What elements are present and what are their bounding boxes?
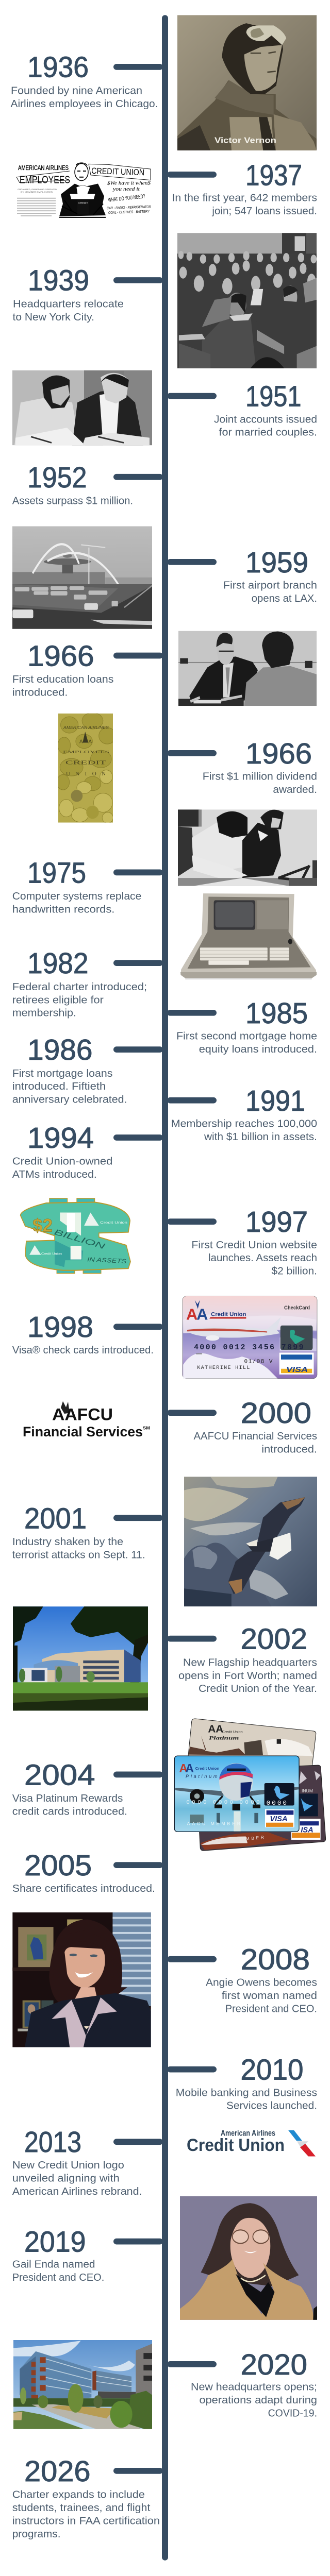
description xyxy=(12,1156,112,1180)
flag card: ISA xyxy=(301,1826,314,1835)
photo: gold coin booklet: CREDIT xyxy=(65,760,107,766)
logo: American Airlines Credit Union: Credit Union xyxy=(187,2136,285,2155)
description: Computer systems replace xyxy=(12,890,141,902)
timeline spine xyxy=(162,15,168,2561)
description: Membership reaches 100,000 xyxy=(171,1118,317,1129)
event: 2026 xyxy=(12,2455,163,2540)
photo: gold coin booklet xyxy=(57,713,116,823)
description: to New York City. xyxy=(13,311,94,323)
illustration: credit union cartoon ad: ORGANIZED, OWNED AND OPERATED xyxy=(18,188,57,191)
description xyxy=(12,1067,127,1106)
connector xyxy=(167,1010,217,1016)
description: for married couples. xyxy=(219,427,317,438)
check card: 4000 xyxy=(196,1352,202,1355)
description: Credit Union-owned xyxy=(12,1156,112,1167)
connector xyxy=(113,1134,163,1141)
photo: eagle in clouds xyxy=(184,1477,317,1606)
connector xyxy=(167,172,217,178)
year: 1998 xyxy=(27,1311,93,1344)
logo: American Airlines Credit Union: American Airlines xyxy=(221,2129,275,2138)
description: President and CEO. xyxy=(12,2272,104,2283)
year: 2008 xyxy=(240,1943,310,1976)
description xyxy=(214,414,317,438)
description: opens in Fort Worth; named xyxy=(178,1670,317,1682)
connector xyxy=(167,1956,217,1962)
year: 1982 xyxy=(27,947,89,980)
year: 1951 xyxy=(245,380,302,413)
logo: American Airlines Credit Union xyxy=(187,2129,316,2157)
description: Share certificates introduced. xyxy=(12,1883,155,1894)
description: join; 547 loans issued. xyxy=(211,205,317,217)
description xyxy=(223,580,317,604)
description xyxy=(12,673,113,699)
logo: AAFCU Financial Services: AAFCU xyxy=(52,1405,113,1423)
connector xyxy=(113,64,163,70)
sepia card: Platinum xyxy=(209,1735,239,1741)
year: 2019 xyxy=(24,2226,86,2258)
logo: AAFCU Financial Services: SM xyxy=(143,1426,150,1430)
connector xyxy=(113,653,163,658)
description: Gail Enda named xyxy=(12,2259,95,2270)
flag card: INUM xyxy=(302,1788,313,1793)
description xyxy=(171,1118,317,1143)
check card: A xyxy=(196,1306,208,1323)
photo: gold coin booklet: EMPLOYEES xyxy=(63,750,109,754)
description: operations adapt during xyxy=(199,2394,317,2406)
description: Industry shaken by the xyxy=(12,1536,123,1548)
year: 2010 xyxy=(240,2054,304,2086)
event: 1998 xyxy=(12,1311,163,1356)
description: membership. xyxy=(12,1007,76,1019)
event: 2013 xyxy=(12,2126,163,2197)
check card xyxy=(183,1296,317,1379)
description: President and CEO. xyxy=(225,2003,317,2014)
description: awarded. xyxy=(273,784,317,795)
illustration: credit union cartoon ad: CAR - RADIO - REFRIGERATOR xyxy=(107,205,151,210)
description: New Flagship headquarters xyxy=(183,1657,317,1668)
front card xyxy=(174,1756,299,1832)
connector xyxy=(167,1218,217,1225)
year: 1985 xyxy=(245,997,308,1030)
photo: gold coin booklet: AMERICAN AIRLINES xyxy=(63,725,109,730)
logo: AAFCU Financial Services: Financial Services xyxy=(23,1424,143,1439)
front card: Platinum xyxy=(186,1774,218,1779)
description: unveiled aligning with xyxy=(12,2173,120,2184)
illustration: credit union cartoon ad: CREDIT UNION xyxy=(91,166,144,177)
description: anniversary celebrated. xyxy=(12,1094,127,1106)
description: First education loans xyxy=(12,673,113,685)
description: First $1 million dividend xyxy=(203,771,317,783)
description: First airport branch xyxy=(223,580,317,591)
event: 1982 xyxy=(12,947,163,1019)
flag card: AACU MEMBER xyxy=(212,1835,264,1844)
connector xyxy=(113,474,163,480)
pin: $2 billion in assets: Credit Union xyxy=(100,1221,128,1225)
year: 2005 xyxy=(24,1850,92,1882)
description xyxy=(176,1030,317,1055)
description: opens at LAX. xyxy=(252,592,317,604)
flag card xyxy=(200,1765,326,1851)
connector xyxy=(113,1515,163,1521)
description: Airlines employees in Chicago. xyxy=(10,98,158,110)
connector xyxy=(113,2468,163,2474)
connector xyxy=(167,559,217,565)
description: First Credit Union website xyxy=(191,1239,317,1251)
flight symbol xyxy=(288,2130,302,2141)
photo: new headquarters 2020 xyxy=(13,2340,152,2429)
description xyxy=(12,890,141,915)
description: Visa Platinum Rewards xyxy=(12,1792,123,1804)
connector xyxy=(113,1862,163,1868)
illustration: credit union cartoon ad: $We have it when$ xyxy=(107,180,151,186)
description xyxy=(12,981,147,1019)
description xyxy=(172,192,317,217)
caption: Victor Vernon xyxy=(214,136,276,145)
description: New Credit Union logo xyxy=(12,2159,124,2171)
description: New headquarters opens; xyxy=(191,2381,317,2393)
pin: $2 billion in assets: $2 xyxy=(32,1215,53,1236)
description xyxy=(10,85,158,110)
description: credit cards introduced. xyxy=(12,1806,127,1817)
description xyxy=(178,1657,317,1694)
event: 2004 xyxy=(12,1759,163,1817)
front card: 0000 xyxy=(267,1800,287,1807)
year: 1936 xyxy=(27,51,89,83)
event: 1959 xyxy=(167,546,317,604)
connector xyxy=(113,277,163,283)
year: 1966 xyxy=(245,738,312,770)
description: introduced. xyxy=(12,687,68,699)
description: Visa® check cards introduced. xyxy=(12,1344,154,1356)
event: 2019 xyxy=(12,2226,163,2283)
description: Joint accounts issued xyxy=(214,414,317,425)
event: 1952 xyxy=(12,461,163,506)
connector xyxy=(167,750,217,756)
photo: Gail Enda xyxy=(180,2196,317,2320)
connector xyxy=(113,1324,163,1330)
pin: $2 billion in assets xyxy=(21,1198,130,1274)
year: 1937 xyxy=(245,159,302,192)
card body xyxy=(183,1296,317,1379)
event: 1966 dividend xyxy=(167,738,317,795)
year: 1966 xyxy=(27,640,94,672)
illustration: credit union cartoon ad: CREDIT xyxy=(78,202,88,205)
logo: AAFCU Financial Services xyxy=(23,1401,150,1439)
year: 2004 xyxy=(24,1759,95,1791)
illustration: credit union cartoon ad: EMPLOYEES xyxy=(20,174,70,185)
description: Charter expands to include xyxy=(12,2489,145,2501)
description: First mortgage loans xyxy=(12,1067,112,1079)
photo: vintage computer xyxy=(180,893,317,979)
description: equity loans introduced. xyxy=(199,1043,317,1055)
year: 1939 xyxy=(28,264,89,297)
description: ATMs introduced. xyxy=(12,1168,97,1180)
event: 2001 xyxy=(12,1502,163,1561)
check card: KATHERINE HILL xyxy=(197,1365,250,1370)
connector xyxy=(113,960,163,966)
event: 1936 xyxy=(10,51,163,110)
description: Founded by nine American xyxy=(11,85,142,97)
connector xyxy=(167,1097,217,1104)
event: 1991 xyxy=(167,1084,317,1143)
photo: gold coin booklet: UNION xyxy=(66,771,106,777)
pin: $2 billion in assets: BILLION xyxy=(53,1228,106,1251)
front card: AACU MEMBER xyxy=(187,1821,240,1826)
event: 2008 xyxy=(167,1943,317,2014)
photo: audience at meeting xyxy=(177,233,317,368)
sepia card: Credit Union xyxy=(222,1731,243,1734)
description xyxy=(12,2159,142,2197)
description: programs. xyxy=(12,2528,61,2540)
description xyxy=(191,1239,317,1277)
description xyxy=(12,2259,104,2283)
event: 2020 xyxy=(167,2348,317,2419)
photo: couple signing papers xyxy=(12,370,152,445)
event: 1975 xyxy=(12,857,163,915)
year: 2002 xyxy=(240,1623,307,1656)
event: 1985 xyxy=(167,997,317,1055)
description: First second mortgage home xyxy=(176,1030,317,1042)
description: In the first year, 642 members xyxy=(172,192,317,204)
description: students, trainees, and flight xyxy=(12,2502,151,2514)
description: Mobile banking and Business xyxy=(176,2087,317,2098)
illustration: credit union cartoon ad xyxy=(16,162,151,217)
photo: Angie Owens xyxy=(12,1912,151,2047)
year: 2001 xyxy=(24,1502,87,1535)
description: retirees eligible for xyxy=(12,994,104,1006)
photo: women at handwritten records xyxy=(178,809,317,886)
description: Headquarters relocate xyxy=(13,298,124,310)
front card: A xyxy=(179,1762,188,1775)
description: introduced. xyxy=(261,1444,317,1455)
illustration: credit union cartoon ad: COAL - CLOTHES - BATTERY xyxy=(108,210,150,215)
connector xyxy=(113,1771,163,1777)
description xyxy=(12,1792,127,1817)
sepia card: AA xyxy=(208,1724,223,1735)
event: 2010 xyxy=(167,2054,317,2112)
year: 2000 xyxy=(240,1397,311,1430)
description xyxy=(194,1430,317,1455)
description: American Airlines rebrand. xyxy=(12,2185,142,2197)
description xyxy=(176,2087,317,2112)
illustration: credit union cartoon ad: AMERICAN AIRLINES xyxy=(18,164,69,172)
connector xyxy=(167,1410,217,1416)
check card: Credit Union xyxy=(211,1311,246,1317)
description: Angie Owens becomes xyxy=(206,1977,317,1988)
year: 1986 xyxy=(27,1034,93,1066)
description: Federal charter introduced; xyxy=(12,981,147,993)
event: 1939 xyxy=(13,264,163,323)
sepia card xyxy=(188,1719,316,1768)
event: 1997 xyxy=(167,1206,317,1277)
front card: VISA xyxy=(270,1815,288,1823)
connector xyxy=(113,1046,163,1053)
check card: VISA xyxy=(286,1366,308,1374)
description xyxy=(13,298,124,323)
year: 2026 xyxy=(24,2455,91,2488)
event: 1994 xyxy=(12,1122,163,1180)
event: 1937 xyxy=(167,159,317,217)
pin: $2 billion in assets: Credit Union xyxy=(41,1252,62,1256)
event: 1986 xyxy=(12,1034,163,1106)
check card: 4000 0012 3456 7899 xyxy=(194,1344,304,1352)
photo: Fort Worth headquarters xyxy=(13,1606,148,1711)
front card: Credit Union xyxy=(195,1766,219,1771)
description: with $1 billion in assets. xyxy=(204,1131,317,1143)
description: handwritten records. xyxy=(12,904,114,915)
pin: $2 billion in assets: IN ASSETS xyxy=(87,1256,127,1265)
description: AAFCU Financial Services xyxy=(194,1430,317,1442)
connector xyxy=(167,2361,217,2367)
year: 1959 xyxy=(245,546,308,579)
event: 1966 education loans xyxy=(12,640,163,699)
check card: A xyxy=(186,1306,197,1323)
connector xyxy=(113,2139,163,2145)
illustration: credit union cartoon ad: you need it xyxy=(112,186,140,192)
description xyxy=(191,2381,317,2419)
event: 2000 xyxy=(167,1397,317,1455)
illustration: credit union cartoon ad: BY MEMBER EMPLOYEES xyxy=(21,191,53,193)
description: $2 billion. xyxy=(272,1265,317,1277)
front card: A xyxy=(185,1762,194,1775)
event: 2005 xyxy=(12,1850,163,1894)
photo: LAX Theme Building xyxy=(12,526,152,629)
description xyxy=(203,771,317,795)
connector xyxy=(167,1636,217,1642)
illustration: credit union cartoon ad: WHAT DO YOU NEED? xyxy=(108,193,145,204)
check card: CheckCard xyxy=(284,1306,310,1311)
year: 2013 xyxy=(24,2126,81,2159)
description: Credit Union of the Year. xyxy=(199,1683,317,1694)
photo: Victor Vernon xyxy=(177,15,317,150)
photo: loan officer at desk xyxy=(178,631,317,706)
check card: 01/08 V xyxy=(244,1359,273,1365)
description xyxy=(12,2489,160,2540)
description: Assets surpass $1 million. xyxy=(12,495,133,506)
description: launches. Assets reach xyxy=(208,1252,317,1264)
connector xyxy=(167,2066,217,2072)
description xyxy=(206,1977,317,2014)
photo: gold coin booklet: A A xyxy=(79,739,92,744)
description: Services launched. xyxy=(226,2100,317,2112)
connector xyxy=(167,393,217,399)
year: 1994 xyxy=(27,1122,94,1155)
description xyxy=(12,1536,145,1561)
event: 1951 xyxy=(167,380,317,438)
event: 2002 xyxy=(167,1623,317,1694)
front card: 0000 0000 0000 xyxy=(187,1799,259,1805)
description: instructors in FAA certification xyxy=(12,2515,160,2527)
description: introduced. Fiftieth xyxy=(12,1080,106,1092)
year: 1997 xyxy=(245,1206,308,1239)
year: 1975 xyxy=(27,857,86,889)
description: first woman named xyxy=(222,1990,317,2002)
description: COVID-19. xyxy=(268,2408,317,2419)
connector xyxy=(113,870,163,875)
Visa Platinum cards xyxy=(174,1719,326,1851)
description: terrorist attacks on Sept. 11. xyxy=(12,1549,145,1561)
year: 1991 xyxy=(245,1084,305,1117)
year: 2020 xyxy=(240,2348,307,2381)
year: 1952 xyxy=(27,461,87,494)
connector xyxy=(113,2239,163,2244)
